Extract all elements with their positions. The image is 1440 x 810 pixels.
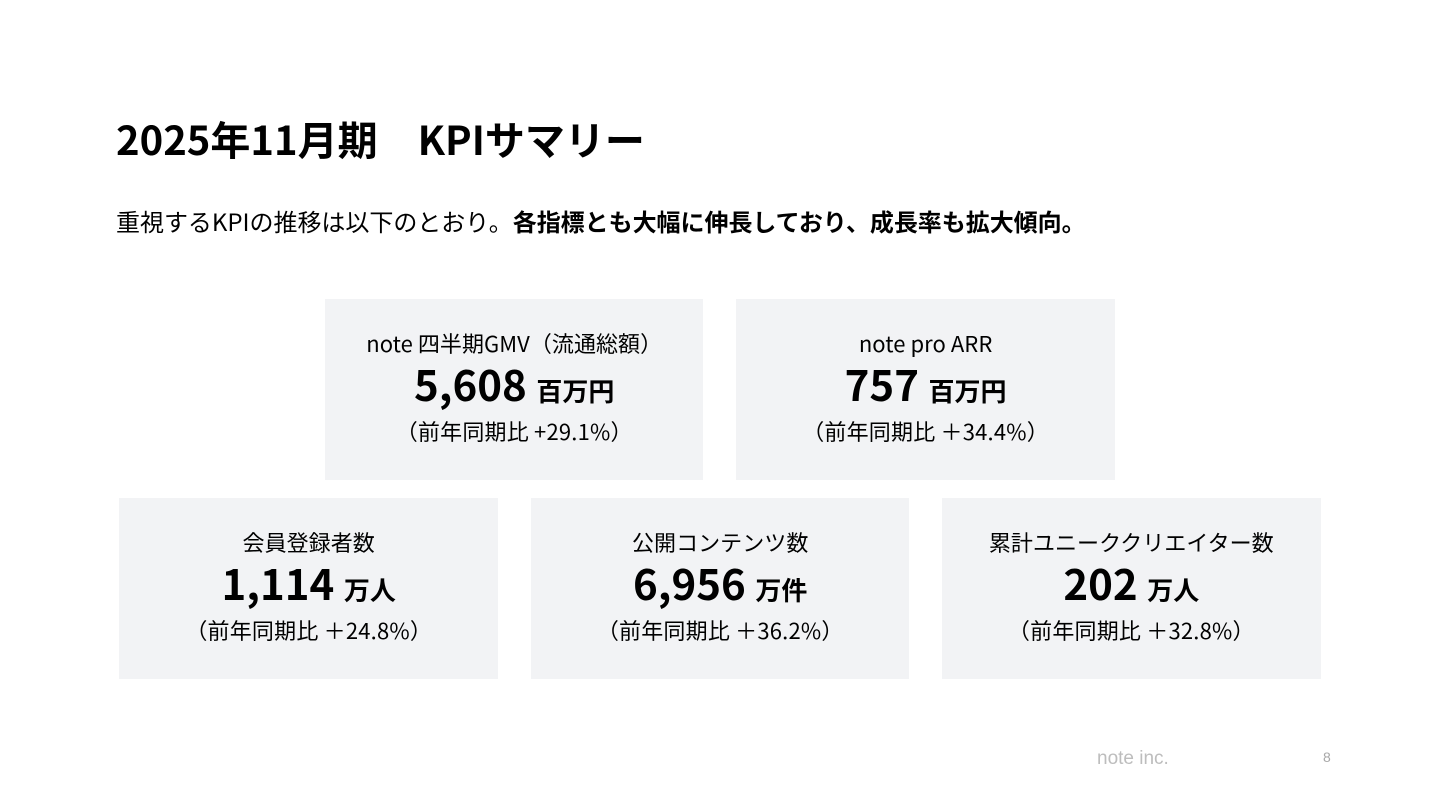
change: ARR: （前年同期比 ＋34.4%） <box>802 415 1049 447</box>
label: members: 会員登録者数 <box>243 526 375 558</box>
label: ARR: note pro ARR <box>859 327 992 359</box>
footer: company name: note inc. <box>1097 748 1169 769</box>
value: members: 1,114 万人 <box>222 552 396 613</box>
label: GMV: note 四半期GMV（流通総額） <box>366 327 662 359</box>
footer: page number: 8 <box>1323 749 1331 765</box>
panel: creators <box>942 498 1321 679</box>
change: GMV: （前年同期比 +29.1%） <box>396 415 633 447</box>
value: ARR: 757 百万円 <box>845 353 1007 414</box>
change: members: （前年同期比 ＋24.8%） <box>185 614 432 646</box>
subtitle text: 重視するKPIの推移は以下のとおり。各指標とも大幅に伸長しており、成長率も拡大傾向。 <box>116 203 1086 238</box>
label: creators: 累計ユニーククリエイター数 <box>989 526 1274 558</box>
value: creators: 202 万人 <box>1063 552 1199 613</box>
value: GMV: 5,608 百万円 <box>414 353 614 414</box>
label: content: 公開コンテンツ数 <box>632 526 808 558</box>
panel: members <box>119 498 498 679</box>
change: creators: （前年同期比 ＋32.8%） <box>1008 614 1255 646</box>
panel: note GMV <box>325 299 703 480</box>
panel: note pro ARR <box>736 299 1115 480</box>
value: content: 6,956 万件 <box>633 552 807 613</box>
title: 2025年11月期 KPIサマリー <box>116 109 645 167</box>
panel: published content <box>531 498 909 679</box>
change: content: （前年同期比 ＋36.2%） <box>597 614 844 646</box>
